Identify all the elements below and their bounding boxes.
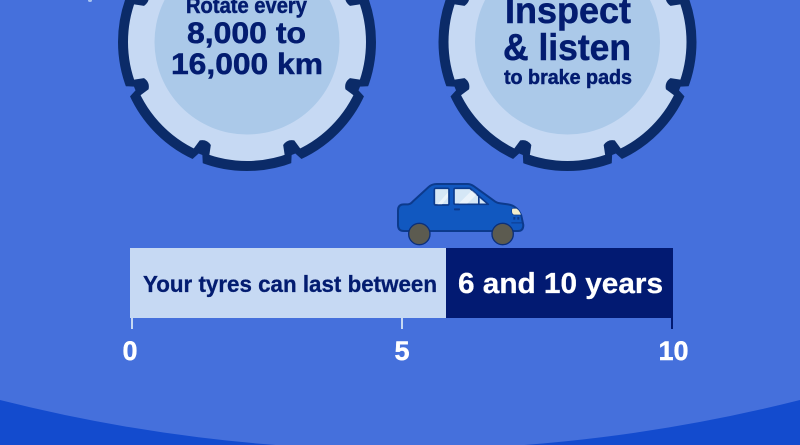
small speck bbox=[88, 0, 92, 2]
car body bbox=[398, 184, 523, 231]
gear: tyre rotation bbox=[123, 0, 371, 166]
rear window bbox=[434, 188, 449, 205]
gear centre disc bbox=[154, 0, 340, 134]
tick 5 bbox=[401, 318, 403, 329]
gear ring bbox=[444, 0, 692, 166]
bottom curved band bbox=[0, 400, 800, 445]
rear wheel bbox=[409, 223, 430, 245]
text: rotate every 8,000 to 16,000 km: 8,000 to bbox=[187, 17, 306, 50]
label 0: 0 bbox=[122, 336, 138, 366]
icon: car bbox=[398, 184, 523, 245]
gear: brake pads bbox=[443, 0, 692, 166]
rear window sheen bbox=[437, 192, 448, 204]
text: 6 and 10 years: 6 and 10 years bbox=[458, 268, 663, 300]
front window sheen bbox=[459, 190, 477, 204]
text: rotate every 8,000 to 16,000 km: 16,000 km bbox=[171, 48, 323, 81]
timeline bar: light segment bbox=[130, 248, 446, 318]
label 5: 5 bbox=[394, 336, 410, 366]
headlight bbox=[512, 208, 521, 215]
front wheel bbox=[492, 223, 513, 245]
text: inspect and listen to brake pads bbox=[503, 0, 632, 89]
gear ring bbox=[123, 0, 371, 166]
gear centre disc bbox=[475, 0, 660, 134]
grille bbox=[511, 217, 523, 223]
gear notches bbox=[123, 0, 371, 166]
gear notches bbox=[443, 0, 692, 166]
tick 10 bbox=[671, 318, 673, 329]
mirror bbox=[478, 196, 480, 204]
front window bbox=[454, 188, 488, 204]
text: inspect and listen to brake pads: to brake pads bbox=[504, 67, 632, 89]
text: your tyres can last between: Your tyres can last between bbox=[143, 271, 437, 297]
timeline bar: dark segment bbox=[446, 248, 673, 318]
door handle bbox=[454, 208, 460, 210]
text: rotate every 8,000 to 16,000 km bbox=[171, 0, 323, 81]
tick 0 bbox=[131, 318, 133, 329]
text: inspect and listen to brake pads: & listen bbox=[503, 27, 631, 68]
label 10: 10 bbox=[658, 336, 689, 366]
